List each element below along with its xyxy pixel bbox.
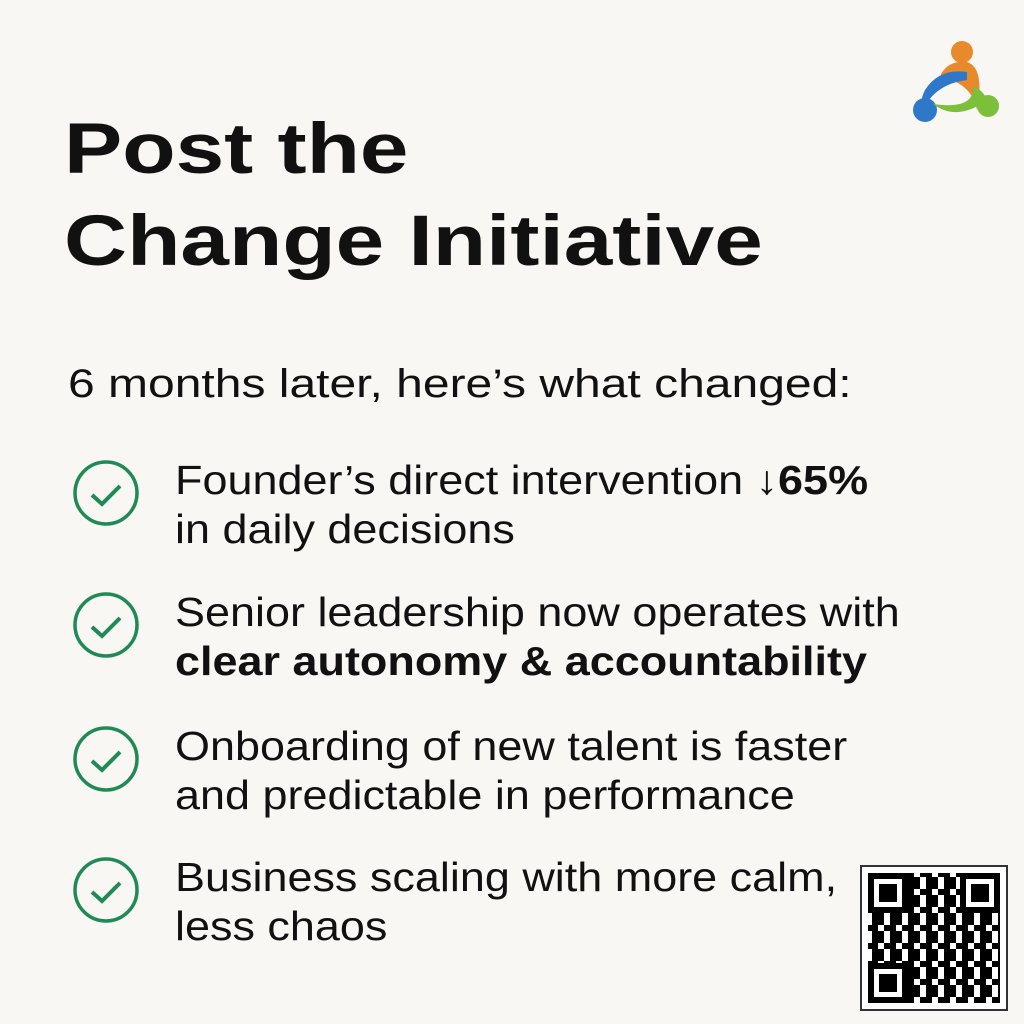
title: Post the [64, 110, 409, 189]
item 1 [73, 457, 868, 552]
item 3: and predictable in performance [175, 772, 795, 818]
item 2: clear autonomy & accountability [175, 638, 867, 684]
logo [913, 41, 999, 122]
item 1: in daily decisions [175, 506, 515, 552]
icon: check [73, 726, 139, 792]
item 3 [73, 723, 847, 818]
item 3: Onboarding of new talent is faster [175, 723, 847, 769]
item 4 [73, 854, 837, 949]
icon: check [73, 592, 139, 658]
item 1: Founder’s direct intervention ↓65% [175, 457, 868, 503]
text: Change Initiative [64, 202, 763, 281]
icon: check [73, 460, 139, 526]
item 4: Business scaling with more calm, [175, 854, 837, 900]
item 4: less chaos [175, 903, 387, 949]
item 2 [73, 589, 900, 684]
item 2: Senior leadership now operates with [175, 589, 900, 635]
QR code [860, 865, 1008, 1011]
icon: check [73, 857, 139, 923]
subtitle: 6 months later, here’s what changed: [68, 362, 852, 406]
